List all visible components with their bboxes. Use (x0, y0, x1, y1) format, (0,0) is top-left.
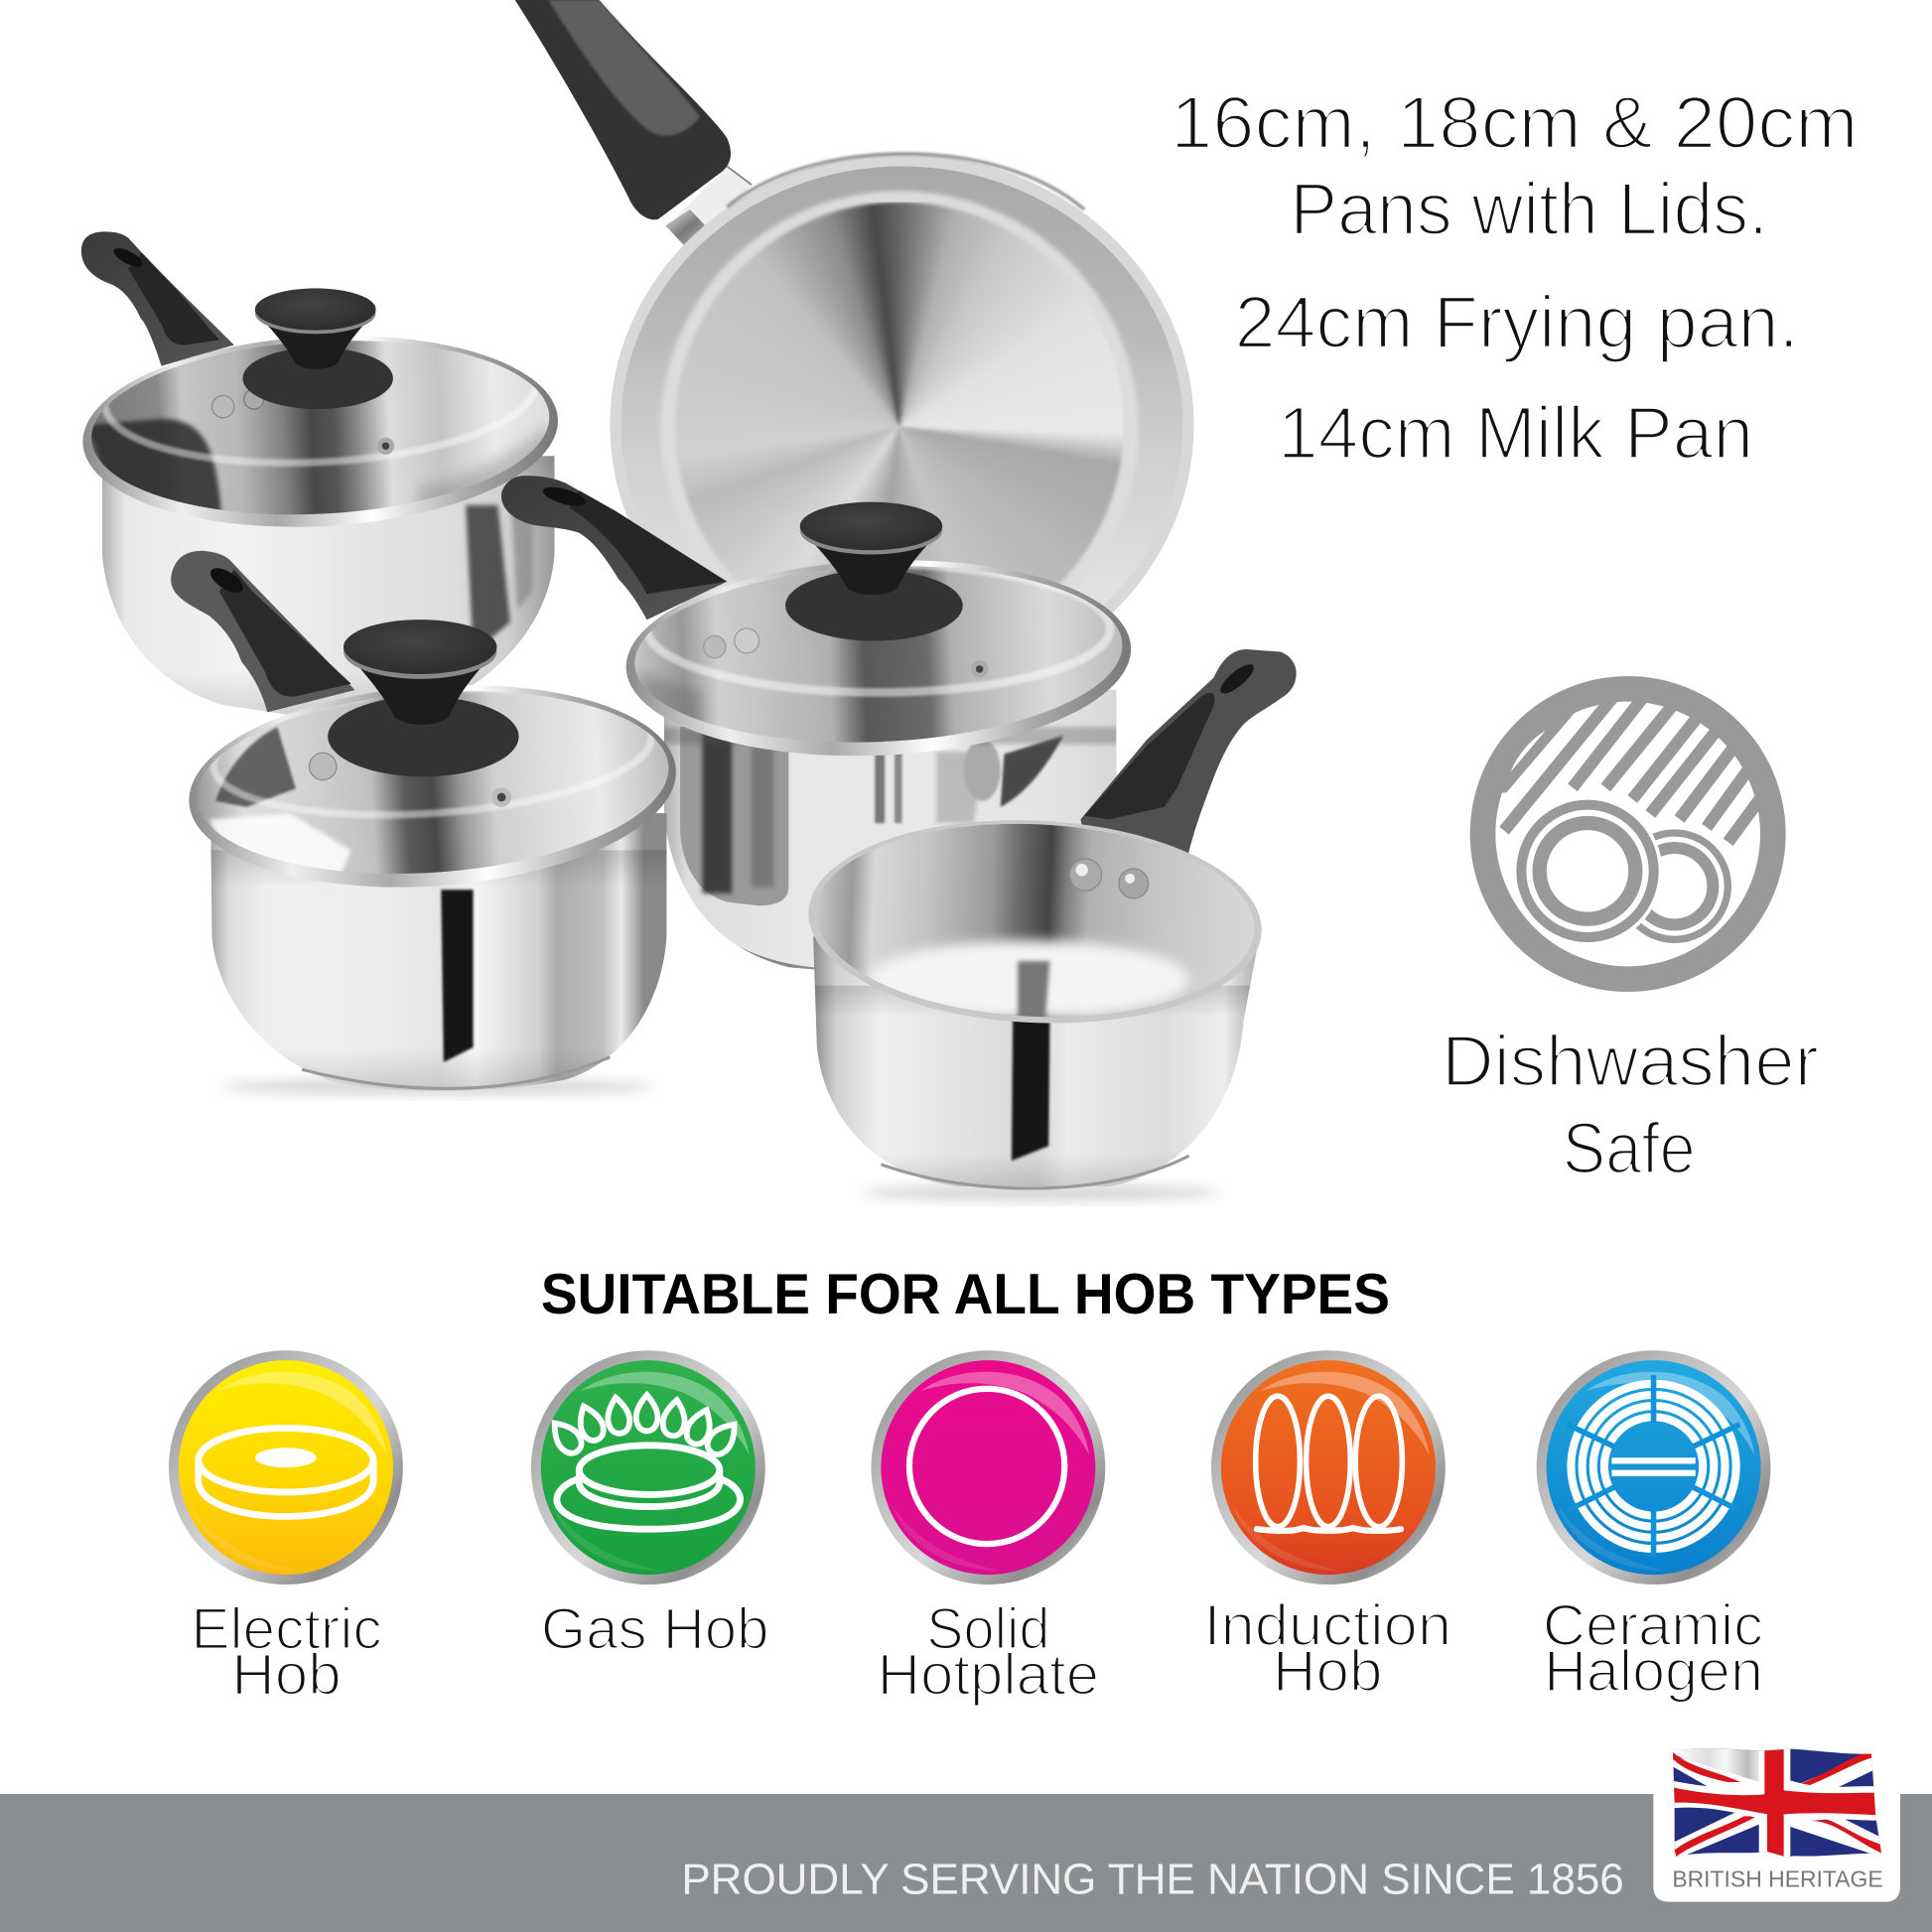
handle (1080, 649, 1297, 857)
label: solid hotplate (878, 1597, 1099, 1708)
text: dishwasher safe (1442, 1022, 1819, 1189)
saucepan back left (77, 231, 563, 727)
text line: pans with lids: Pans with Lids. (1290, 168, 1768, 250)
footer text: PROUDLY SERVING THE NATION SINCE 1856 (681, 1857, 1624, 1904)
badge: british heritage (1653, 1745, 1900, 1902)
text line: frying pan: 24cm Frying pan. (1235, 281, 1799, 363)
heading: hob types: SUITABLE FOR ALL HOB TYPES (541, 1263, 1390, 1326)
text: dishwasher safe: Safe (1563, 1110, 1696, 1189)
label: solid hotplate: Solid (926, 1597, 1049, 1662)
product photo: saucepan set (77, 0, 1297, 1201)
icon: solid hotplate (871, 1350, 1105, 1585)
text line: milk pan: 14cm Milk Pan (1278, 392, 1753, 475)
milk pan front right (801, 649, 1297, 1201)
icon: electric hob (169, 1350, 403, 1585)
shadow (863, 1184, 1220, 1201)
icon: ceramic halogen (1537, 1350, 1770, 1585)
label: induction hob: Induction (1204, 1593, 1451, 1658)
icon: gas hob (531, 1350, 765, 1585)
label: ceramic halogen: Ceramic (1543, 1593, 1763, 1658)
label: gas hob: Gas Hob (541, 1597, 768, 1662)
label: solid hotplate: Hotplate (878, 1643, 1099, 1708)
footer banner (0, 1794, 1932, 1932)
label: induction hob (1204, 1593, 1451, 1704)
label: electric hob (191, 1597, 382, 1708)
frying pan (515, 0, 1194, 696)
label: ceramic halogen: Halogen (1544, 1639, 1763, 1704)
label: ceramic halogen (1543, 1593, 1763, 1704)
text: dishwasher safe: Dishwasher (1442, 1022, 1819, 1101)
handle (501, 476, 727, 620)
panel: sizes text (1171, 81, 1859, 475)
text line: pan sizes: 16cm, 18cm & 20cm (1171, 81, 1859, 164)
icon: dishwasher safe (1456, 676, 1786, 992)
label: electric hob: Electric (191, 1597, 382, 1662)
label: electric hob: Hob (231, 1643, 342, 1708)
panel: hob types (169, 1350, 1770, 1708)
icon: induction hob (1211, 1350, 1446, 1585)
handle (81, 231, 234, 366)
saucepan back right (501, 476, 1135, 973)
icon: union flag (1668, 1745, 1886, 1860)
handle (171, 551, 354, 712)
saucepan front left (171, 551, 690, 1097)
badge text: BRITISH HERITAGE (1672, 1866, 1883, 1892)
pan handle (515, 0, 731, 219)
shadow (221, 1078, 653, 1095)
label: induction hob: Hob (1273, 1639, 1383, 1704)
